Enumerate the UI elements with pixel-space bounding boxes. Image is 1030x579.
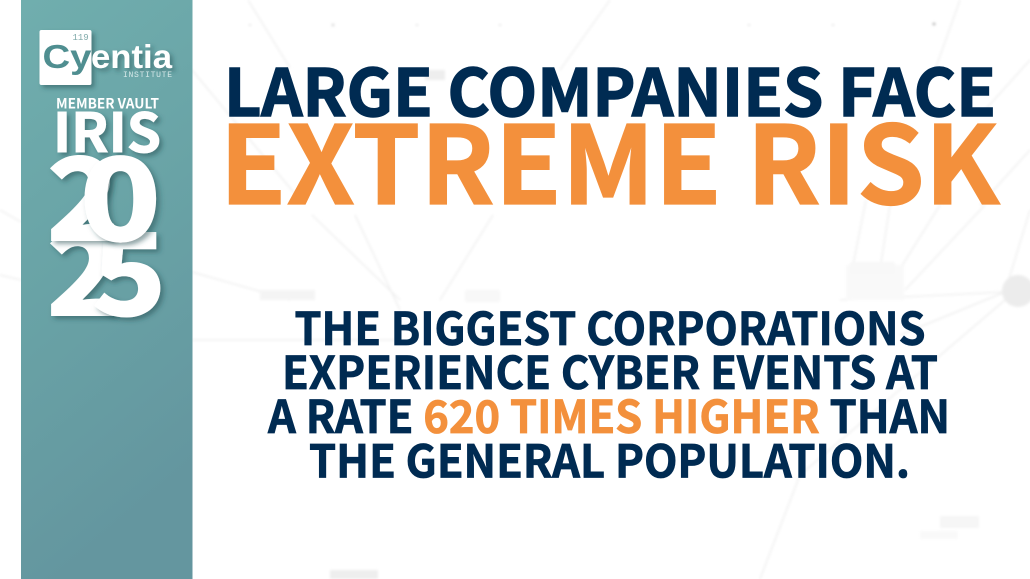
year: 20: 0	[79, 108, 162, 275]
year: 25	[46, 181, 167, 350]
body statement: THE BIGGEST CORPORATIONS	[294, 293, 926, 358]
year: 20: 2	[46, 107, 120, 275]
year: 25: 5	[91, 181, 167, 350]
label: member vault: MEMBER VAULT	[56, 94, 159, 114]
title: EXTREME RISK	[220, 80, 1000, 236]
body statement	[267, 293, 950, 490]
logo: Cyentia Institute: 119	[72, 33, 89, 43]
logo: Cyentia Institute: entia	[91, 38, 173, 75]
body statement: THE GENERAL POPULATION.	[309, 426, 910, 490]
body statement: A RATE 620 TIMES HIGHER THAN	[267, 381, 950, 446]
label: IRIS: IRIS	[53, 89, 161, 168]
year: 25: 2	[46, 182, 120, 350]
body statement: EXPERIENCE CYBER EVENTS AT	[282, 337, 938, 402]
sidebar panel	[21, 0, 192, 579]
logo: Cyentia Institute	[40, 30, 173, 85]
title: LARGE COMPANIES FACE	[224, 41, 996, 135]
logo: Cyentia Institute: Cy	[42, 38, 92, 75]
logo: Cyentia Institute: INSTITUTE	[123, 71, 172, 80]
